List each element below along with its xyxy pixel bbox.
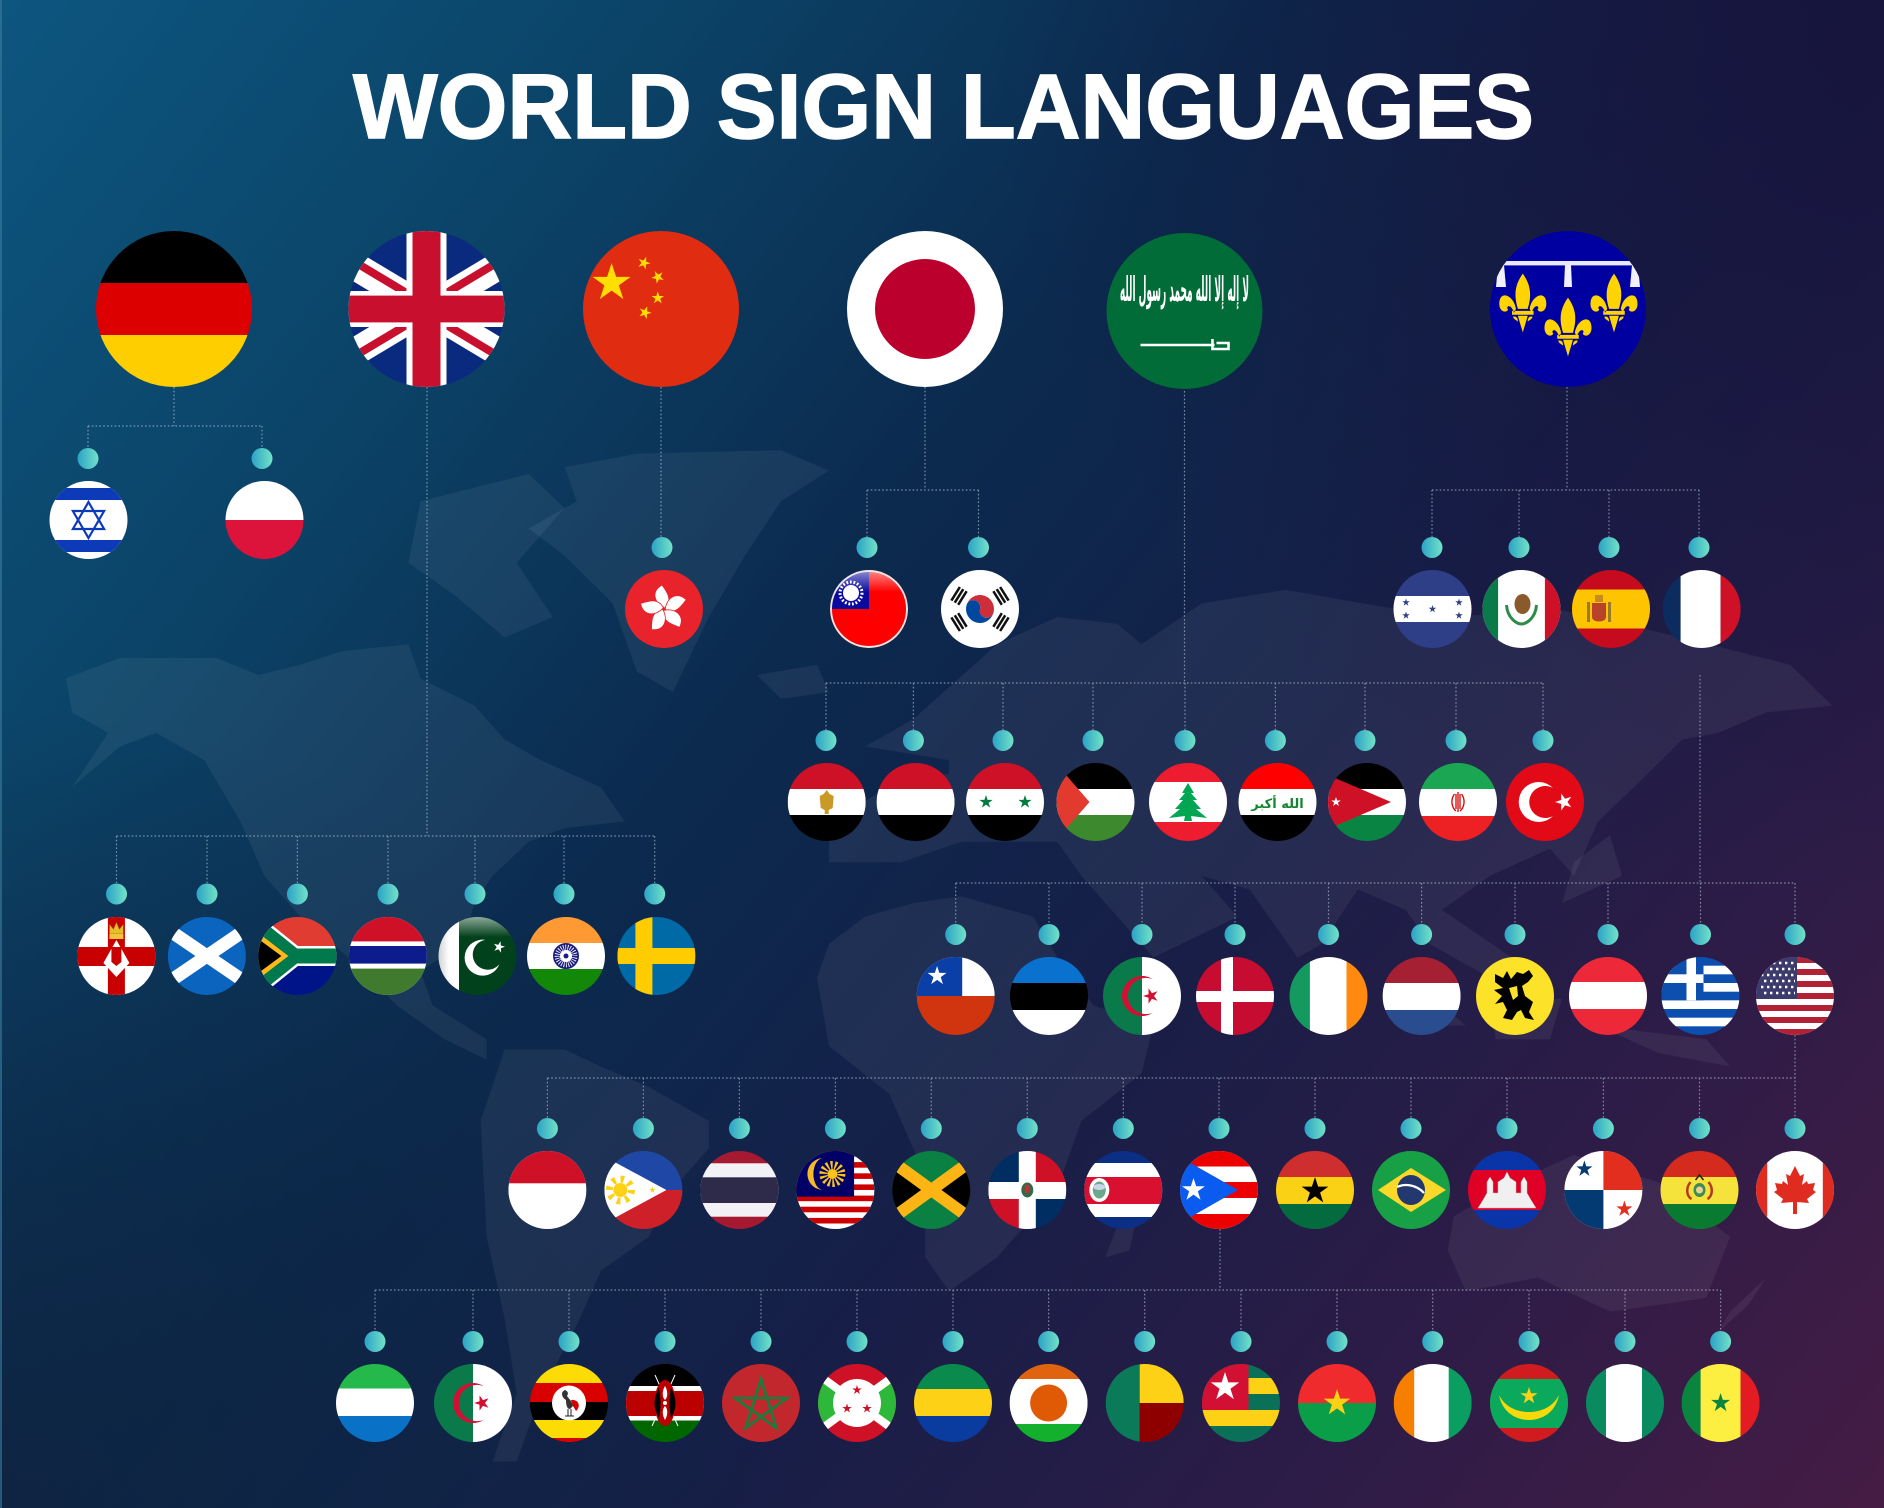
marker: Jamaica [921,1118,942,1139]
flag: Greece [1662,957,1740,1035]
marker: Costa Rica [1113,1118,1134,1139]
flag: Costa Rica [1084,1151,1162,1229]
marker: Panama [1593,1118,1614,1139]
marker: Algeria [1132,924,1152,945]
flag: Morocco [722,1364,800,1442]
flag: India [527,917,605,995]
marker: Syria [992,730,1014,751]
flag: Gambia [349,917,427,995]
family: row from United States [508,1035,1834,1229]
marker: Ghana [1304,1118,1326,1139]
flag: Togo [1202,1364,1280,1442]
flag: Iraq: الله أكبر [1250,795,1304,812]
marker: Dominican Republic [1017,1118,1038,1139]
marker: Flanders [1504,924,1526,945]
flag: Kenya [626,1364,704,1442]
flag: Nigeria [1586,1364,1664,1442]
marker: Bolivia [1689,1118,1710,1139]
marker: Indonesia [537,1118,558,1139]
marker: Morocco [750,1331,772,1352]
marker: Sweden [644,884,665,904]
flag: Iran [1419,763,1497,841]
marker: Ireland [1318,924,1339,945]
marker: Burundi [846,1331,868,1352]
marker: Yemen [903,730,924,751]
marker: Kenya [654,1331,676,1352]
connector: USA to fourth row [547,1035,1795,1118]
marker: Mexico [1508,537,1530,558]
marker: Thailand [729,1118,750,1139]
marker: Togo [1230,1331,1252,1352]
flag: Burkina Faso [1298,1364,1376,1442]
flag: Hong Kong [625,570,703,648]
flag: Japan [847,231,1003,387]
marker: Hong Kong [652,537,672,558]
flag: Estonia [1010,957,1088,1035]
marker: Palestine [1082,730,1104,751]
connector: France to ASL row [956,675,1795,924]
connector: Japan [867,387,978,537]
flag: Ireland [1290,957,1368,1035]
world map backdrop [66,450,1832,1462]
marker: Benin [1134,1331,1155,1352]
marker: Canada [1784,1118,1806,1139]
flag: Benin [1106,1364,1184,1442]
flag: Panama [1564,1151,1642,1229]
family: Arab Sign Language [788,233,1584,841]
marker: Gabon [942,1331,964,1352]
flag: Palestine [1056,763,1134,841]
marker: Uganda [558,1331,580,1352]
flag: South Korea [941,570,1019,648]
marker: Egypt [816,730,836,751]
flag: Turkey [1506,763,1584,841]
flag: South Africa [258,917,336,995]
flag: Israel [50,481,128,559]
flag: Iraq [1238,763,1316,841]
marker: Algeria [462,1331,484,1352]
flag: Sierra Leone [336,1364,414,1442]
flag: Niger [1010,1364,1088,1442]
flag: Ivory Coast [1394,1364,1472,1442]
marker: Denmark [1224,924,1246,945]
family: German Sign Language [50,231,304,559]
marker: Pakistan [464,884,486,904]
marker: Scotland [196,884,218,904]
marker: Burkina Faso [1326,1331,1348,1352]
flag: Dominican Republic [988,1151,1066,1229]
marker: Malaysia [825,1118,846,1139]
flag: Syria [966,763,1044,841]
flag: Scotland [168,917,246,995]
marker: France [1688,537,1710,558]
connector: China [660,387,662,537]
flag: Taiwan [830,570,908,648]
flag: Flanders [1476,957,1554,1035]
flag: Indonesia [508,1151,586,1229]
flag: Old French arms [1490,231,1646,387]
flag: Senegal [1682,1364,1760,1442]
flag: Malaysia [796,1151,874,1229]
marker: Netherlands [1411,924,1432,945]
connector: Puerto Rico to fifth row [375,1229,1721,1331]
flag: Poland [226,481,304,559]
flag: Pakistan [438,917,517,995]
marker: Philippines [633,1118,654,1139]
flag: Bolivia [1660,1151,1738,1229]
flag: Puerto Rico [1180,1151,1258,1229]
flag: Burundi [813,1364,901,1442]
marker: Senegal [1710,1331,1731,1352]
flag: France [1663,570,1741,648]
flag: Algeria [1103,957,1181,1035]
marker: Niger [1038,1331,1059,1352]
marker: South Africa [287,884,308,904]
flag: Philippines [604,1151,682,1229]
marker: Brazil [1400,1118,1422,1139]
flag: Mauritania [1490,1364,1568,1442]
flag: Chile [917,957,995,1035]
marker: Iraq [1265,730,1286,751]
flag: Algeria (second) [434,1364,512,1442]
marker: Chile [945,924,966,945]
marker: Jordan [1354,730,1376,751]
connector: Saudi Arabia [826,391,1543,730]
connector: Germany [88,387,262,448]
title: WORLD SIGN LANGUAGES [353,56,1534,158]
flag: Yemen [877,763,955,841]
marker: Taiwan [856,537,878,558]
marker: USA [1784,924,1806,945]
marker: Lebanon [1174,730,1196,751]
marker: N. Ireland [106,884,127,904]
flag: United States [1756,957,1834,1035]
flag: Sweden [617,917,695,995]
marker: India [554,884,574,904]
flag: Jordan [1328,763,1406,841]
marker: Poland [252,448,272,469]
marker: Estonia [1038,924,1060,945]
flag: Honduras [1394,570,1472,648]
flag: Lebanon [1149,763,1227,841]
marker: Mauritania [1518,1331,1540,1352]
flag: Ghana [1276,1151,1354,1229]
family: American Sign Language tree [917,675,1834,1035]
flag: Germany [96,231,252,387]
marker: Israel [78,448,98,469]
flag: Saudi Arabia: لا إله إلا الله محمد رسول الله [1120,270,1249,311]
flag: Jamaica [887,1151,975,1229]
marker: Puerto Rico [1208,1118,1230,1139]
flag: Gabon [914,1364,992,1442]
flag: Spain [1572,570,1650,648]
flag: Cambodia [1468,1151,1546,1229]
flag: Mexico [1482,570,1561,648]
marker: Nigeria [1614,1331,1636,1352]
flag: China [583,231,739,387]
marker: South Korea [968,537,989,558]
marker: Iran [1446,730,1466,751]
family: French Sign Language [1394,231,1741,648]
flag: Denmark [1196,957,1274,1035]
marker: Spain [1598,537,1620,558]
marker: Greece [1690,924,1711,945]
family: Chinese Sign Language [583,231,739,648]
marker: Turkey [1532,730,1554,751]
connector: UK [116,387,655,883]
flag: Netherlands [1383,957,1461,1035]
flag: Canada [1756,1151,1834,1229]
connector: France [1432,387,1699,537]
marker: Austria [1598,924,1618,945]
flag: United Kingdom [348,231,504,387]
marker: Honduras [1422,537,1442,558]
marker: Cambodia [1496,1118,1518,1139]
marker: Sierra Leone [364,1331,386,1352]
flag: Northern Ireland [77,917,155,995]
flag: Saudi Arabia [1106,233,1262,389]
flag: Thailand [700,1151,778,1229]
flag: Egypt [788,763,866,841]
family: row from Puerto Rico [336,1229,1760,1442]
marker: Gambia [378,884,398,904]
flag: Brazil [1372,1151,1450,1229]
family: British Sign Language [77,231,695,995]
flag: Austria [1569,957,1647,1035]
marker: Ivory Coast [1422,1331,1443,1352]
flag: Uganda [530,1364,608,1442]
family: Japanese Sign Language [830,231,1019,648]
